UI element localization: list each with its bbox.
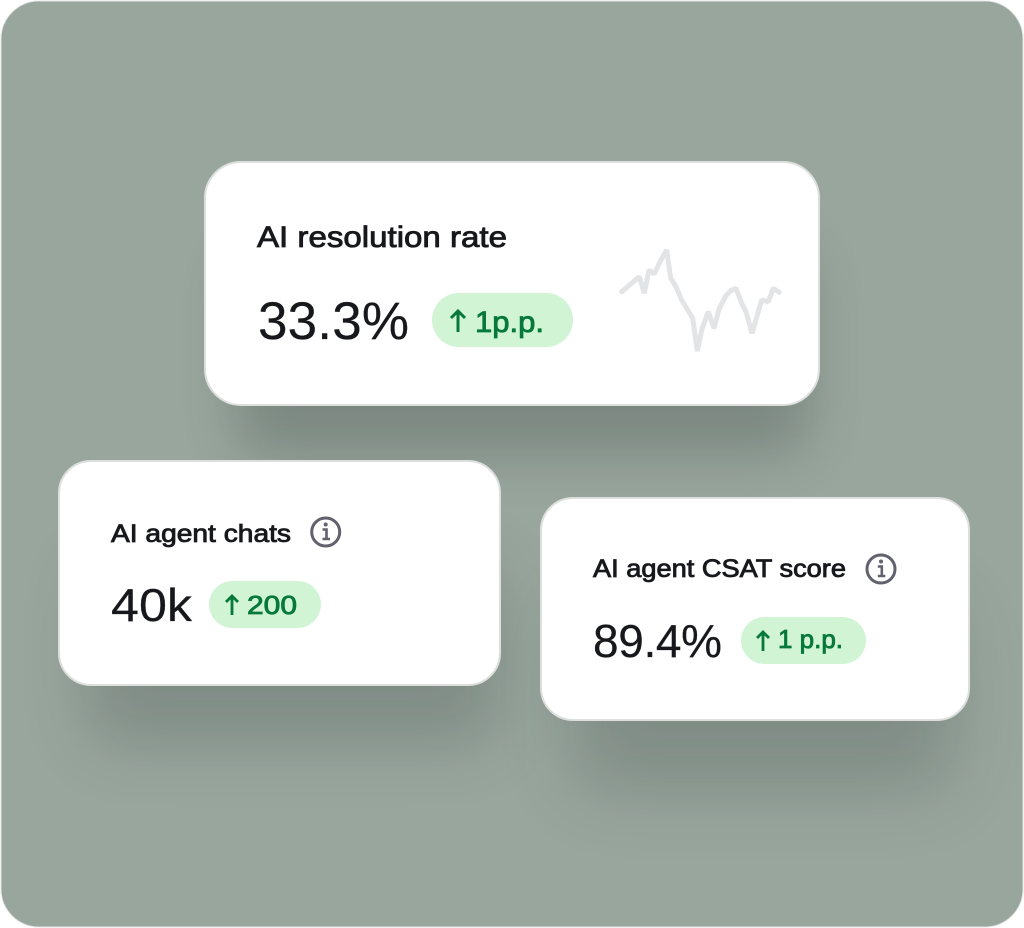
card: AI resolution rate [205, 162, 819, 405]
icon: info [867, 555, 895, 583]
card shadows [85, 250, 955, 790]
card 2 surface [59, 461, 500, 685]
card 2 value: 40k [111, 579, 193, 631]
card 2 change badge [209, 581, 321, 628]
card 1 change badge: 1p.p. [475, 306, 544, 339]
card: AI agent chats [59, 461, 500, 685]
card 3 value: 89.4% [593, 615, 722, 667]
card 1 sparkline [622, 250, 779, 351]
card 1 change badge [432, 293, 573, 347]
card 1 surface [205, 162, 819, 405]
card 3 heading: AI agent CSAT score [593, 555, 846, 583]
icon: info [312, 518, 340, 546]
card 3 change badge [741, 617, 866, 664]
card 3 change badge: 1 p.p. [778, 624, 843, 654]
card 1 value: 33.3% [258, 292, 409, 351]
card: AI agent CSAT score [541, 498, 969, 720]
card 1 heading: AI resolution rate [257, 221, 507, 254]
card 2 change badge: 200 [247, 590, 297, 620]
card 3 surface [541, 498, 969, 720]
card 2 heading: AI agent chats [111, 520, 291, 548]
